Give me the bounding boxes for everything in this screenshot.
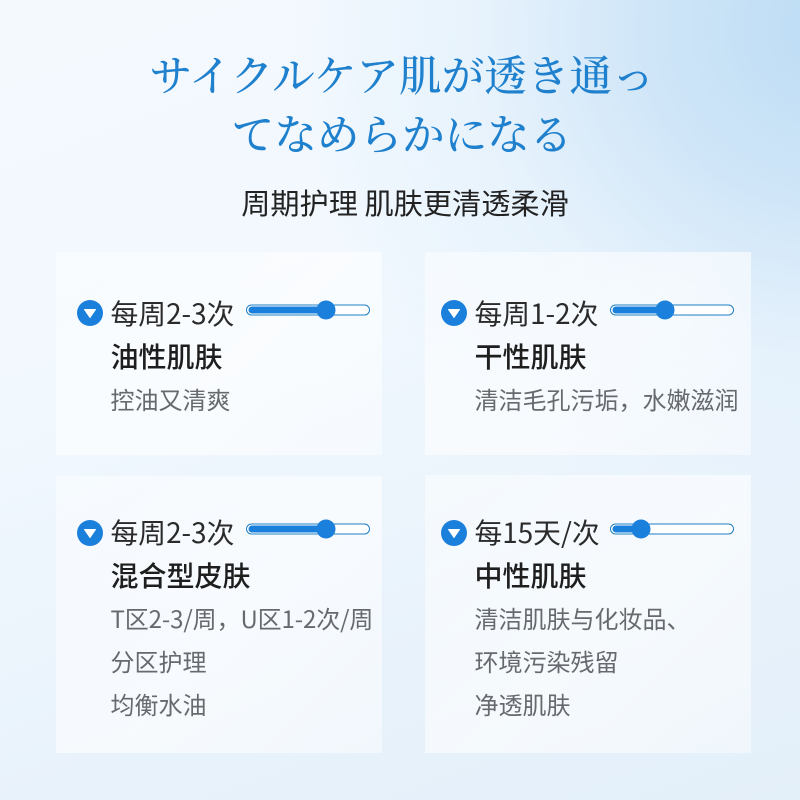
panel: dry skin — [425, 252, 751, 455]
frequency slider — [610, 520, 734, 538]
description: T区2-3/周，U区1-2次/周 — [110, 600, 373, 635]
description: 清洁肌肤与化妆品、 — [474, 600, 690, 635]
description — [110, 600, 373, 721]
icon: down arrow badge — [77, 300, 103, 326]
skin type: 混合型皮肤 — [110, 555, 251, 595]
icon: down arrow badge — [77, 520, 103, 546]
description: 分区护理 — [110, 643, 206, 678]
frequency: 每周2-3次 — [110, 293, 234, 333]
frequency: 每15天/次 — [474, 512, 600, 552]
icon: down arrow badge — [441, 520, 467, 546]
frequency: 每周1-2次 — [474, 293, 598, 333]
skin type: 油性肌肤 — [110, 336, 223, 376]
description: 环境污染残留 — [474, 643, 618, 678]
panel: normal skin — [425, 475, 751, 753]
description: 净透肌肤 — [474, 686, 570, 721]
description: 清洁毛孔污垢，水嫩滋润 — [474, 381, 738, 416]
frequency slider — [246, 300, 370, 320]
description: 均衡水油 — [110, 686, 206, 721]
title: てなめらかになる — [232, 102, 572, 163]
frequency: 每周2-3次 — [110, 512, 234, 552]
title: サイクルケア肌が透き通っ — [149, 43, 655, 104]
description: 控油又清爽 — [110, 381, 230, 416]
description — [474, 600, 690, 721]
skin type: 中性肌肤 — [474, 555, 587, 595]
frequency slider — [610, 300, 734, 320]
panel: combination skin — [56, 476, 382, 753]
subtitle: 周期护理 肌肤更清透柔滑 — [241, 181, 569, 223]
frequency slider — [246, 520, 370, 538]
panel: oily skin — [56, 252, 382, 455]
skin type: 干性肌肤 — [474, 336, 587, 376]
title — [149, 43, 655, 163]
icon: down arrow badge — [441, 300, 467, 326]
